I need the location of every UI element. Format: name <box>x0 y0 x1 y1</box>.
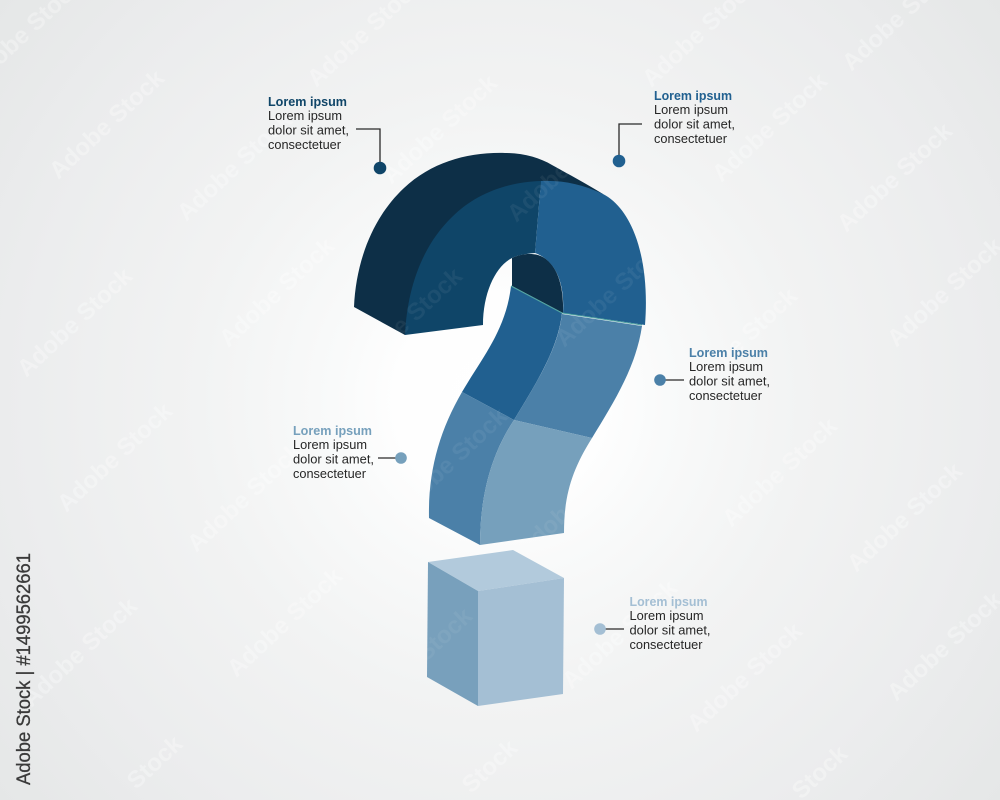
marker dot <box>395 452 407 464</box>
watermark over shapes: Adobe Stock <box>352 602 478 722</box>
callout: bottom right: dolor sit amet, <box>630 622 710 638</box>
watermark pattern: Adobe Stock <box>52 397 178 517</box>
stem upper right segment <box>514 314 642 438</box>
hook front left segment <box>405 181 541 335</box>
connector <box>378 457 401 459</box>
watermark pattern: Adobe Stock <box>172 106 298 226</box>
stem lower left segment <box>429 392 514 545</box>
connector <box>660 379 684 381</box>
connector <box>619 124 642 155</box>
callout: top left: consectetuer <box>268 137 342 152</box>
callout: top right <box>613 88 735 167</box>
heading: Lorem ipsum <box>689 345 768 360</box>
watermark over shapes: Adobe Stock <box>387 402 513 522</box>
marker dot <box>594 623 606 635</box>
callout: right: consectetuer <box>689 388 763 403</box>
thin teal edge lines <box>511 286 642 325</box>
watermark pattern: Adobe Stock <box>17 592 143 712</box>
callout: right <box>654 345 770 403</box>
body text: Lorem ipsum <box>630 608 704 623</box>
watermark pattern: Adobe Stock <box>12 262 138 382</box>
heading: Lorem ipsum <box>654 88 732 103</box>
callout: left <box>293 423 407 481</box>
cube right face <box>478 578 564 706</box>
watermark pattern: Adobe Stock <box>842 457 968 577</box>
body text: Lorem ipsum <box>268 108 342 123</box>
hook back side face <box>354 153 603 335</box>
watermark pattern: Stock <box>122 730 188 795</box>
watermark pattern: Adobe Stock <box>377 69 503 189</box>
callout: left: dolor sit amet, <box>293 452 374 466</box>
connector <box>356 129 380 162</box>
watermark over shapes: Adobe Stock <box>550 232 676 352</box>
inner hole wall <box>512 254 563 313</box>
watermark pattern: Stock <box>457 734 523 799</box>
marker dot <box>654 374 666 386</box>
watermark over shapes <box>342 107 676 722</box>
heading: Lorem ipsum <box>293 423 372 438</box>
watermark pattern: Adobe Stock <box>182 437 308 557</box>
callout: top right: dolor sit amet, <box>654 116 735 132</box>
watermark over shapes: Adobe Stock <box>512 442 638 562</box>
callout: top left: dolor sit amet, <box>268 122 349 138</box>
callout: top right: consectetuer <box>654 131 728 146</box>
watermark pattern: Adobe Stock <box>682 617 808 737</box>
callout: left: consectetuer <box>293 466 367 481</box>
question mark dot: cube <box>427 550 564 706</box>
watermark pattern: Adobe Stock <box>707 67 833 187</box>
callout: top left <box>268 94 386 174</box>
body text: Lorem ipsum <box>689 359 763 374</box>
stem upper left segment <box>462 286 562 420</box>
callout: right: dolor sit amet, <box>689 374 770 388</box>
stem lower right segment <box>480 420 592 545</box>
callout: bottom right <box>594 594 710 652</box>
callout: bottom right: consectetuer <box>630 637 703 652</box>
watermark pattern: Adobe Stock <box>557 574 683 694</box>
watermark over shapes: Adobe Stock <box>342 262 468 382</box>
question mark hook <box>354 153 646 335</box>
cube top face <box>428 550 564 591</box>
watermark pattern: Adobe Stock <box>832 117 958 237</box>
watermark pattern: Adobe Stock <box>677 282 803 402</box>
stock id side text: Adobe Stock | #1499562661 <box>14 553 35 785</box>
body text: Lorem ipsum <box>293 437 367 452</box>
body text: Lorem ipsum <box>654 102 728 117</box>
connector <box>600 628 624 630</box>
question mark stem <box>429 286 642 545</box>
hook front right segment <box>535 181 646 325</box>
watermark pattern: Adobe Stock <box>214 232 340 352</box>
cube left face <box>427 562 478 706</box>
marker dot <box>374 162 386 174</box>
watermark over shapes: Adobe Stock <box>502 107 628 227</box>
marker dot <box>613 155 625 167</box>
heading: Lorem ipsum <box>268 94 347 109</box>
heading: Lorem ipsum <box>630 594 708 609</box>
watermark pattern: Adobe Stock <box>222 562 348 682</box>
watermark pattern: Adobe Stock <box>717 412 843 532</box>
watermark pattern: Adobe Stock <box>44 64 170 184</box>
